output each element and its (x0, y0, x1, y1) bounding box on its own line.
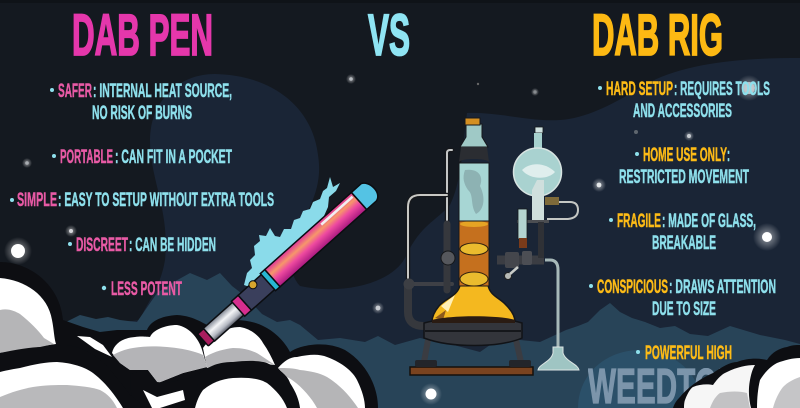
cloud sliver (77, 336, 112, 357)
mountains (40, 273, 800, 408)
rig list: home use only: : (727, 145, 730, 166)
pen vapor (244, 177, 340, 290)
rig glass foot (538, 347, 579, 370)
pen list: simple: : EASY TO SETUP WITHOUT EXTRA TOOLS (58, 190, 274, 211)
pen tip (198, 329, 214, 346)
pen list: discreet: DISCREET (76, 235, 128, 256)
pen cap (351, 179, 381, 210)
pen list: safer (50, 81, 232, 124)
rig liquid rings (460, 221, 488, 286)
rig collar (459, 147, 489, 162)
rig list: hard setup (598, 79, 770, 122)
pen gold button (247, 279, 259, 290)
cloud puff centre (112, 325, 207, 383)
icon: glass dab rig (404, 118, 579, 375)
rig list: hard setup: HARD SETUP (606, 79, 673, 100)
rig small tube (518, 209, 527, 248)
pen list: discreet (68, 235, 216, 256)
clouds: right group (673, 345, 800, 408)
pen body (265, 192, 367, 287)
pen list: safer: NO RISK OF BURNS (92, 103, 192, 124)
rig left pipes (404, 150, 455, 326)
rig bulb (514, 127, 562, 220)
rig neck liquid (459, 221, 489, 286)
cloud puff right (278, 355, 365, 408)
pen list: simple (10, 190, 274, 211)
pen navy section (238, 274, 275, 310)
pen list: portable: : CAN FIT IN A POCKET (115, 147, 232, 168)
pen clip (321, 197, 353, 225)
pen list: simple: SIMPLE (17, 190, 57, 211)
clouds: left group (0, 262, 378, 408)
black cloud outline (0, 262, 378, 408)
rig list: home use only: HOME USE ONLY (643, 145, 727, 166)
rig platform (517, 220, 549, 223)
pen list: portable (52, 147, 232, 168)
rig cap (465, 118, 480, 125)
rig list: powerful high (636, 343, 732, 364)
pen cyan band (260, 270, 280, 291)
rig right arm (545, 202, 578, 219)
pen list: safer: : INTERNAL HEAT SOURCE, (93, 81, 232, 102)
pen list: safer: SAFER (58, 81, 92, 102)
rig right tube (545, 260, 558, 348)
rig neck glass (459, 163, 489, 221)
pen list: less potent: LESS POTENT (111, 279, 182, 300)
pen list: discreet: : CAN BE HIDDEN (129, 235, 216, 256)
rig top glass (460, 124, 488, 147)
rig list: home use only (619, 145, 749, 188)
cloud puff bottom left (0, 345, 147, 408)
rig base board (410, 367, 533, 375)
pen list: less potent (102, 279, 182, 300)
stars (4, 74, 781, 405)
rig flask (432, 285, 515, 325)
cloud puff lower centre (192, 361, 300, 408)
rig connector (497, 222, 544, 280)
rig legs (415, 340, 531, 367)
rig list: conspicious: CONSPICIOUS (597, 277, 668, 298)
icon: dab pen (195, 177, 381, 349)
title: VS: VS (368, 3, 410, 68)
cloud puff behind pen (203, 327, 275, 368)
title: DAB PEN: DAB PEN (72, 3, 213, 68)
cloud small fragment (130, 370, 200, 408)
cloud puff top left (0, 278, 56, 353)
rig list: fragile (609, 211, 756, 254)
rig list: conspicious: DUE TO SIZE (652, 299, 716, 320)
pen list: portable: PORTABLE (60, 147, 113, 168)
pen silver barrel (203, 302, 244, 341)
rig list: fragile: BREAKABLE (652, 233, 716, 254)
pen pink band (231, 295, 251, 316)
rig list: fragile: FRAGILE (617, 211, 661, 232)
rig stand ring (424, 316, 522, 346)
rig list: conspicious (589, 277, 776, 320)
